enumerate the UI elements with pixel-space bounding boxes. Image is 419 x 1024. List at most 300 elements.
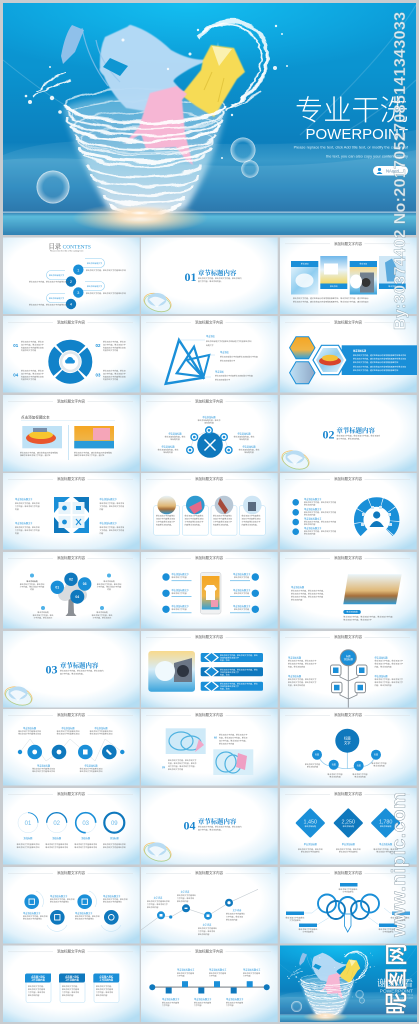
slide: section 01 <box>141 238 278 315</box>
radial labels: 加标题内容 <box>239 437 249 441</box>
cards: 添加文字内容单击添加 <box>184 516 204 520</box>
caption pill: 单击添加标题 <box>346 610 358 614</box>
slide title: 添加标题文字内容 <box>334 241 362 246</box>
petal text: 内容 <box>100 531 103 535</box>
closing title: 谢谢观看 <box>377 978 413 988</box>
chart labels: 单击添加文字内容单击 <box>226 912 245 916</box>
hero subtitle: POWERPOINT <box>305 126 408 143</box>
ring captions: 单击添加文字内容单击添加 <box>45 842 68 846</box>
contents items: 单击添加标题文字 <box>49 273 64 277</box>
cards: 单击添加文字内容单击 <box>184 514 204 518</box>
slide: closing thank-you: the text, you can also copy your content <box>387 996 414 1000</box>
cards: 单击添加文字内容单击 <box>242 514 261 518</box>
slide: cycle diagram <box>3 316 140 392</box>
timeline labels: 单击添加标题文字 <box>226 997 244 1001</box>
radial labels: 单击添加标题 <box>202 415 216 419</box>
bubble diagram: 标题 <box>344 736 351 740</box>
numbered text blocks: 内容添加文字内容 <box>21 348 36 352</box>
slide title: 添加标题文字内容 <box>195 555 223 560</box>
quotes and text: “ <box>214 737 217 743</box>
blue header cards: 单击添加文字内容， <box>62 984 79 988</box>
contents items: 单击添加文字内容，单击添加文字内容单击添加 <box>29 302 69 306</box>
zigzag labels: 单击添加标题 <box>23 726 37 730</box>
circle captions: 单击添加文字内容，单击添加 <box>23 914 48 918</box>
chart labels: 单击添加内容 <box>177 899 188 903</box>
bubble diagram: 标题 <box>315 752 319 756</box>
side text: 单击添加标题 <box>374 674 388 678</box>
list bullets: 单击添加内容 <box>304 522 315 526</box>
timeline labels: 单击添加文字内容单 <box>226 1000 243 1004</box>
slide: staggered circles <box>3 867 140 944</box>
slide: contents <box>3 238 140 314</box>
numbered text blocks: 内容添加文字内容单击添加 <box>21 346 44 350</box>
petal text: 内容 <box>15 531 19 535</box>
chart labels <box>147 890 245 936</box>
slide: section 01: 容文字内容，单击添加内容。 <box>198 279 223 283</box>
petal text: 文字内容，单击添加文字内容 <box>15 528 40 532</box>
circle captions: 单击添加文字内容单击 <box>75 916 94 920</box>
illustration: laundry water tornado <box>3 5 416 235</box>
blue bars: 内容，添加 <box>220 672 230 676</box>
circle captions: 单击添加文字内容，单击添加 <box>50 897 75 901</box>
diamond stats: 单击添加标题 <box>380 824 391 828</box>
blue bars: 添加内容单击添加文字 <box>220 670 239 674</box>
list bullets: 单击添加文字内容，单击添加文字内容 <box>304 510 336 514</box>
slide title: 添加标题文字内容 <box>195 399 223 404</box>
cards: 文字内容单击添加文字 <box>213 520 232 524</box>
slide: closing thank-you: Please replace the text, click Add title text <box>385 994 414 996</box>
quotes and text <box>162 732 247 773</box>
section number: 02 <box>322 428 334 442</box>
petal text: 单击添加标题文字 <box>15 497 33 501</box>
numbered text blocks: 02 <box>96 343 101 348</box>
hero description: Please replace the text, click Add title text, or modify the content of <box>294 144 409 150</box>
radial labels: 单击添加标题内容，单击 <box>158 448 179 452</box>
numbered text blocks: 内容添加文字内容 <box>103 377 118 381</box>
hero title: 专业干洗 <box>295 95 408 127</box>
interlocked rings <box>318 894 379 919</box>
timeline labels <box>162 968 261 1007</box>
text block <box>291 585 325 602</box>
slide: bubble tree <box>280 709 417 786</box>
captions: 单击添加文字内容，建议您在展示时采用微软 <box>20 450 58 454</box>
ring captions: 单击添加文字内容单击添加 <box>74 845 97 849</box>
timeline labels: 单击添加标题文字 <box>162 997 180 1001</box>
numbered text blocks: 单击添加文字内容，单击添 <box>21 340 44 344</box>
blue bars: 内容，添加 <box>220 658 230 662</box>
bubble diagram: 标题 <box>332 762 336 766</box>
numbered text blocks: 03 <box>96 372 101 378</box>
contents heading: 目录 CONTENTS <box>48 242 91 250</box>
bubble diagram: 单击添加内容 <box>307 764 318 768</box>
caption pill: 单击添加文字内容，单击添加文字内容，单击添加文字内容 <box>343 614 393 618</box>
labels: 单击添加文字内容单击 <box>286 916 305 920</box>
slide title: 添加标题文字内容 <box>57 791 85 796</box>
side text: 内容，单击添加内容 <box>288 664 305 668</box>
feature lists: 单击添加标题文字 <box>172 572 190 576</box>
cards: 添加文字内容单击添加 <box>156 516 175 520</box>
slide title: 添加标题文字内容 <box>334 791 362 796</box>
labels: 文字内容单击 <box>342 890 354 894</box>
blue header cards <box>25 974 119 1002</box>
chart labels: 单击添加内容 <box>226 918 237 922</box>
watermark: site name: 昵图网 <box>383 943 409 1015</box>
list bullets: 单击添加标题文字 <box>304 497 322 501</box>
ring charts <box>18 813 124 833</box>
petal text <box>15 497 124 535</box>
slide title: 添加标题文字内容 <box>195 948 223 954</box>
branch diagram: 标题 <box>346 654 351 658</box>
photo cards: 单击添加 <box>301 262 308 266</box>
ring captions <box>17 836 126 849</box>
numbered text blocks: 加文字内容，单击添加文字 <box>103 342 126 346</box>
slide: three cards <box>3 946 140 1022</box>
radial labels: 单击添加标题 <box>168 432 182 436</box>
list bullets: 单击添加文字内容，单击添加文字内容 <box>304 529 336 533</box>
tree labels: 单击添加标题 <box>37 610 49 614</box>
stat captions: 单击添加文字内容单击 <box>376 850 395 854</box>
diamond stats: 单击添加标题 <box>305 824 316 828</box>
zigzag nodes <box>18 739 125 761</box>
slide title: 添加标题文字内容 <box>57 870 85 875</box>
side text: 内容，单击添加内容 <box>288 683 305 687</box>
stat captions: 单击添加文字内容，单击添加 <box>298 847 323 851</box>
blue header cards: 工作花园内容 <box>31 978 46 982</box>
petal text: 文字内容，单击添加文字内容 <box>100 528 124 532</box>
slide: hexagon photos <box>280 316 417 392</box>
slide title: 添加标题文字内容 <box>57 948 85 954</box>
radial diagram <box>187 427 232 458</box>
blue bars: 添加内容单击添加文字 <box>220 684 239 688</box>
blue header cards: 单击添加文字内容单 <box>28 987 45 991</box>
stat captions: 单击添加文字内容单击 <box>301 850 320 854</box>
callouts: 单击添加 <box>206 334 215 338</box>
numbered text blocks: 内容添加文字内容 <box>21 377 36 381</box>
chart labels: 文字内容 <box>203 922 212 926</box>
slide: progress rings <box>3 788 140 864</box>
timeline labels: 单击添加文字内容单 <box>243 971 260 975</box>
cards: 内容单击添加内容。 <box>213 522 230 526</box>
feature lists: 单击添加文字内容 <box>234 575 249 579</box>
blue header cards: 文字内容，单击添加 <box>96 990 113 994</box>
closing subtitle: POWERPOINT <box>380 988 413 994</box>
petal text: 单击添加文字内容，单击添加 <box>15 501 40 505</box>
hero description: the text, you can also copy your content directly <box>326 154 408 158</box>
zigzag labels: 单击添加文字内容单击添加 <box>18 732 41 736</box>
side text: 单击添加文字内容，单击添加文字 <box>374 658 403 662</box>
sub heading: 点击添加标题文本 <box>21 414 50 420</box>
chart labels: 单击添加文字内容单击 <box>177 893 196 897</box>
ring captions: 添加标题 <box>110 836 119 840</box>
hexagon images <box>290 337 347 384</box>
text block: 单击添加文字内容，建议您在展示时采用微软雅黑字体，单击添加文字内容，建议您在展示 <box>293 296 369 300</box>
feature lists: 单击添加标题文字 <box>172 604 190 608</box>
blue bars: 添加内容单击添加文字 <box>220 656 239 660</box>
quotes and text: 单击添加文字内容，单击添加文字 <box>219 732 247 736</box>
timeline labels: 单击添加标题文字 <box>194 997 212 1001</box>
labels: 单击添加文字内容单击 <box>299 927 318 931</box>
text block: 单击添加文字内容，建议您在展示时采用微软雅黑字体，单击添加文字内容，建议您在展示 <box>293 300 369 304</box>
triangle graphic <box>166 340 215 384</box>
side text: 单击添加文字内容，单击添加文字 <box>374 662 403 666</box>
circle captions: 单击添加文字内容单击 <box>23 916 42 920</box>
side text: 单击添加标题 <box>374 656 388 660</box>
numbered text blocks: 单击添加文字内容，单击添 <box>21 368 44 372</box>
text block: 单击添加文字内容，单击添加文字内容， <box>291 588 325 592</box>
petal text: 单击添加文字内容，单击添加 <box>15 525 40 529</box>
bubble diagram: 单击添加内容 <box>373 764 385 768</box>
tree labels: 单击添加文字内容，单击 <box>33 613 54 617</box>
slide: diamond stats <box>280 788 417 864</box>
cards: 添加文字内容单击添加 <box>213 516 232 520</box>
side text: 单击添加文字内容，单击添加文字 <box>288 677 316 681</box>
slide: triangles <box>141 316 278 392</box>
stat captions: 单击添加文字内容单击 <box>339 850 358 854</box>
callouts: 单击添加 <box>215 370 224 374</box>
circle captions: 单击添加文字内容，单击添加 <box>75 914 100 918</box>
petal text: 单击添加标题文字 <box>100 521 118 525</box>
slide: two images <box>3 395 140 472</box>
slide: four round cards <box>141 473 278 550</box>
slide title: 添加标题文字内容 <box>334 555 362 560</box>
contents items: 单击添加标题文字 <box>87 261 102 265</box>
slide: washer with bars <box>141 631 278 708</box>
tree labels: 单击添加文字内容，单击添加 <box>20 582 44 586</box>
section number: 03 <box>46 662 58 676</box>
section number: 04 <box>184 818 196 832</box>
ring charts: 02 <box>53 821 61 827</box>
feature lists: 单击添加文字内容 <box>172 591 187 595</box>
slide title: 添加标题文字内容 <box>57 712 85 717</box>
image: blue garments <box>166 728 206 754</box>
quotes and text: 单击添加文字内容，单击添加文字 <box>168 758 196 762</box>
quotes and text: 内容，单击添加文字内容，单击添 <box>168 761 196 765</box>
circle captions: 单击添加文字内容单击 <box>50 900 69 904</box>
timeline labels: 单击添加文字内容单 <box>209 971 226 975</box>
timeline labels: 单击添加文字内容单 <box>177 971 194 975</box>
contents items: 单击添加文字内容，单击添加文字内容单击添加 <box>29 280 69 284</box>
tree chart: 02 <box>69 578 73 582</box>
tree labels: 文字内容，单击添加文字内容 <box>97 584 121 588</box>
quotes and text: 内容，单击添加文字内容，单击添 <box>219 736 247 740</box>
feature lists: 单击添加文字内容 <box>234 607 249 611</box>
blue bars: 单击添加文字内容，单击添加文字内容，单击 <box>220 653 258 657</box>
slide title: 添加标题文字内容 <box>195 712 223 717</box>
diamond stats: 1,450 <box>304 820 317 826</box>
circle captions <box>23 894 128 920</box>
section title: 章节标题内容 <box>336 426 375 434</box>
slide title: 添加标题文字内容 <box>195 320 223 325</box>
diamond stats: 1,780 <box>379 820 392 826</box>
image: pink garments <box>213 749 253 775</box>
blue text panel: 单击添加文字内容，建议您在展示时采用微软雅黑字体 <box>353 368 398 372</box>
blue text panel: 单击添加标题 <box>353 348 367 352</box>
author pill <box>373 166 408 176</box>
labels: 单击添加文字内容单击 <box>339 887 358 891</box>
parallelogram image <box>343 574 402 604</box>
petal text: 单击添加文字内容，单击添加 <box>100 525 124 529</box>
tree labels: 单击添加文字内容，单击添加 <box>97 582 121 586</box>
section title: 章节标题内容 <box>198 268 237 277</box>
zigzag labels: 单击添加标题 <box>61 726 75 730</box>
numbered text blocks <box>13 340 126 381</box>
numbered text blocks: 加文字内容，单击添加文字 <box>21 372 44 376</box>
petal text: 内容 <box>15 507 19 511</box>
chart labels: 单击添加文字内容单击添加 <box>147 899 170 903</box>
cards: 文字内容单击添加文字 <box>242 520 261 524</box>
photo cards: 单击添加 <box>330 284 338 288</box>
petal text: 文字内容，单击添加文字内容 <box>15 504 40 508</box>
panel: hero cover slide <box>3 3 416 235</box>
side text: 内容，单击添加内容 <box>374 683 392 687</box>
chart labels: 文字内容 <box>181 890 190 894</box>
side text <box>288 656 403 687</box>
callouts <box>206 334 258 382</box>
cards <box>154 496 265 535</box>
photo cards: 单击添加 <box>360 262 367 266</box>
timeline labels: 单击添加文字内容单 <box>194 1000 211 1004</box>
list bullets: 单击添加内容 <box>304 512 315 516</box>
radial labels: 加标题内容 <box>163 450 173 454</box>
ring captions: 添加标题 <box>52 836 62 840</box>
radial labels: 加标题内容 <box>170 437 180 441</box>
slide title: 添加标题文字内容 <box>334 476 362 481</box>
slide: four petals <box>3 473 140 550</box>
radial labels: 单击添加标题 <box>242 444 256 448</box>
tree chart: 04 <box>75 595 79 599</box>
slide title: 添加标题文字内容 <box>57 320 85 325</box>
side text: 单击添加文字内容，单击添加文字 <box>288 662 316 666</box>
blue bars: 内容，添加 <box>220 686 230 690</box>
callouts: 标题文字 <box>206 343 214 347</box>
section title: 章节标题内容 <box>198 816 237 826</box>
ring captions: 单击添加文字内容单击添加 <box>45 845 68 849</box>
bubble diagram: 标题 <box>357 764 361 768</box>
labels: 单击添加文字内容单击 <box>379 927 398 931</box>
cards: 添加文字内容单击添加 <box>242 516 261 520</box>
blue bars: 单击添加文字内容，单击添加文字内容，单击 <box>220 682 258 686</box>
quotes and text: 单击添加文字内容 <box>219 742 234 746</box>
feature lists: 单击添加文字内容 <box>172 607 187 611</box>
side text: 单击添加文字内容，单击添加文字 <box>374 680 403 684</box>
radial labels: 加标题内容 <box>244 450 254 454</box>
tree chart <box>51 573 91 616</box>
circle captions: 单击添加标题文字 <box>75 911 93 915</box>
slide: tools radial <box>141 395 278 472</box>
slide: trend line <box>141 867 278 944</box>
zigzag labels: 单击添加文字内容单击添加 <box>80 769 102 773</box>
list bullets: 单击添加内容 <box>304 502 315 506</box>
petal diagram <box>54 497 89 533</box>
numbered text blocks: 内容添加文字内容单击添加 <box>21 374 44 378</box>
stat captions: 单击添加文字内容，单击添加 <box>373 847 398 851</box>
diamond stats: 2,250 <box>342 820 355 826</box>
feature lists: 单击添加文字内容 <box>172 575 187 579</box>
blue header cards: 文字内容，单击添加 <box>62 990 79 994</box>
circle captions: 单击添加标题文字 <box>23 911 41 915</box>
blue text panel <box>342 345 417 375</box>
ring captions: 单击添加文字内容单击添加 <box>74 842 97 846</box>
numbered text blocks: 单击添加文字内容，单击添 <box>103 368 126 372</box>
slide: section 04: 容文字内容，单击添加内容。 <box>198 828 223 832</box>
zigzag labels: 单击添加文字内容单击添加 <box>57 732 79 736</box>
quotes and text: 加文字内容，单击添加文字内容， <box>219 738 247 742</box>
callouts: 单击添加标题文字内容单击添加标题文字内容 <box>215 374 253 378</box>
cycle chart <box>47 338 94 385</box>
text block: 单击添加内容 <box>291 598 302 602</box>
slide title: 添加标题文字内容 <box>334 712 362 717</box>
slide: section 02 <box>280 395 417 472</box>
slide: two sketches <box>141 709 278 786</box>
radial labels: 单击添加标题内容，单击添 <box>198 418 220 422</box>
blue bars: 单击添加文字内容，单击添加文字内容，单击 <box>220 668 258 672</box>
contents items: 2 <box>70 279 73 284</box>
caption pill <box>343 610 393 622</box>
side text: 单击添加文字内容，单击添加文字 <box>288 680 316 684</box>
photo cards: 单击添加 <box>388 284 396 288</box>
tree labels: 单击添加标题 <box>26 579 38 583</box>
numbered text blocks: 加文字内容，单击添加文字 <box>21 342 44 346</box>
list bullets: 单击添加文字内容，单击添加文字内容 <box>304 520 336 524</box>
ring captions: 单击添加文字内容单击添加 <box>103 845 126 849</box>
contents items: 单击添加文字内容，单击添加文字内容单击添加 <box>86 291 126 295</box>
cards: 文字内容单击添加文字 <box>184 520 204 524</box>
numbered text blocks: 04 <box>13 372 19 378</box>
contents items: 单击添加标题文字 <box>87 284 102 288</box>
blue header cards: 单击添加文字内容单 <box>62 987 79 991</box>
petal text: 单击添加标题文字 <box>100 497 118 501</box>
feature lists: 单击添加文字内容 <box>234 591 249 595</box>
slide: section 01: 单击添加文字内容，单击添加文字内容，单击添加内 <box>198 276 242 280</box>
timeline labels: 文字内容 <box>194 1003 202 1007</box>
slide: contents: Please enter the title of the catalog here <box>50 250 83 253</box>
chart labels: 文字内容，单击添加 <box>198 929 215 933</box>
stat captions: 单击添加标题 <box>379 842 393 846</box>
blue header cards: 工作花园内容 <box>65 978 80 982</box>
blue header cards: 点击输入用标 <box>65 974 80 978</box>
numbered text blocks: 加文字内容，单击添加文字 <box>103 372 126 376</box>
slide: zigzag timeline <box>3 709 140 786</box>
petal text: 文字内容，单击添加文字内容 <box>100 504 124 508</box>
blue text panel: 单击添加文字内容，建议您在展示时采用微软雅黑字体单击添加 <box>353 364 406 368</box>
slide: section 02: 容文字内容，单击添加内容。 <box>336 436 361 440</box>
blue header cards: 文字内容，单击添加 <box>28 990 45 994</box>
timeline labels: 文字内容 <box>243 974 251 978</box>
slide: tree <box>3 552 140 628</box>
chart labels: 单击添加文字内容单击 <box>198 926 217 930</box>
list bullets: 单击添加标题文字 <box>304 507 322 511</box>
side text: 内容，单击添加内容 <box>374 664 392 668</box>
blue header cards: 工作花园内容 <box>99 978 114 982</box>
watermark: image id: By:30374402 No:20170527085141343033 <box>392 12 409 330</box>
radial labels: 单击添加标题内容，单击 <box>165 434 186 438</box>
section title: 章节标题内容 <box>60 660 99 670</box>
blue header cards: 点击输入用标 <box>31 974 46 978</box>
diamond stats: 单击添加标题 <box>343 824 354 828</box>
tree labels: 文字内容，单击添加文字内容 <box>20 584 44 588</box>
cards: 单击添加文字内容单击 <box>156 514 175 518</box>
slide: section 04: 单击添加文字内容，单击添加文字内容，单击添加内 <box>198 824 242 828</box>
text block: 单击添加文字内容，单击添加文字内容 <box>291 594 323 598</box>
zigzag labels: 单击添加标题 <box>84 764 98 768</box>
quotes and text: 加文字内容，单击添加文字内容， <box>168 764 196 768</box>
list bullets: 单击添加标题文字 <box>304 526 322 530</box>
callouts: 单击添加 <box>220 350 229 354</box>
quotes and text: ” <box>162 767 165 773</box>
ring captions: 添加标题 <box>24 836 33 840</box>
cards: 单击添加文字内容单击 <box>213 514 232 518</box>
radial labels: 单击添加标题内容，单击 <box>239 448 260 452</box>
